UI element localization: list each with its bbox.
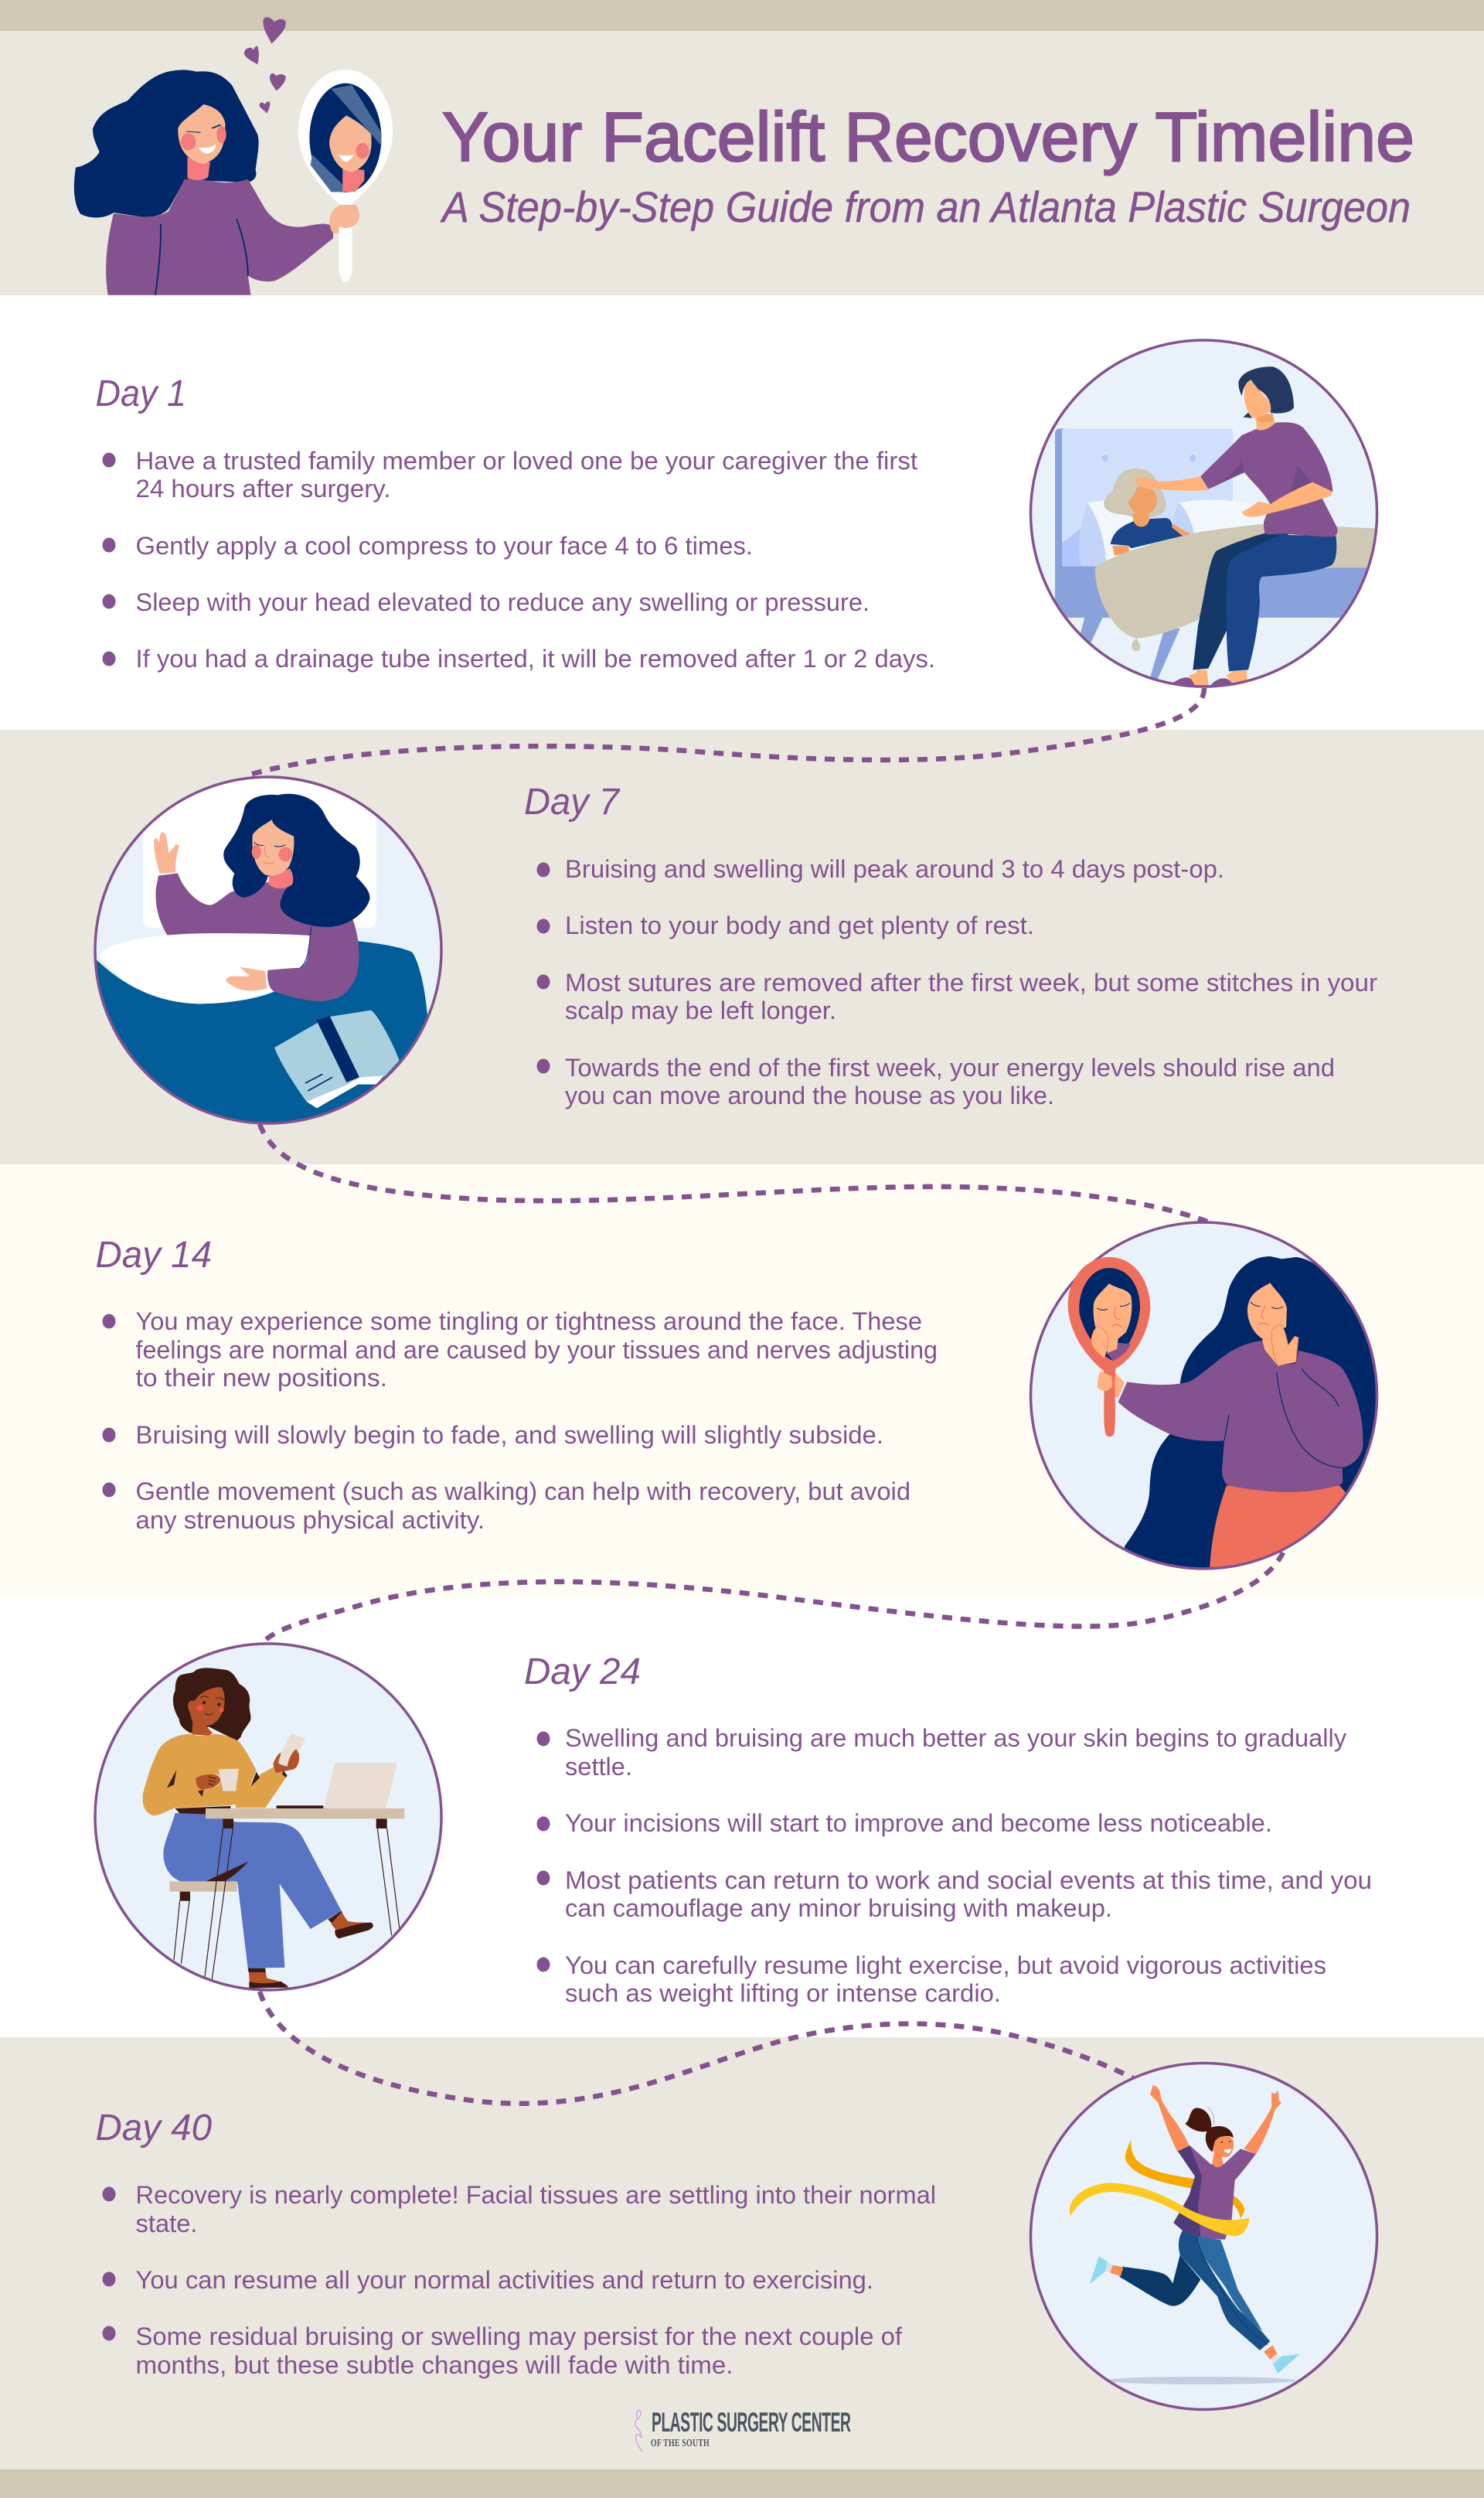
panel: header [0,17,1484,295]
text block: day 14 list: to their new positions. [136,1364,387,1392]
icon: logo figure [635,2410,642,2452]
text block: day 24 list: You can carefully resume light exercise, but avoid vigorous activities [565,1951,1326,1979]
heading: day 40: Day 40 [96,2108,212,2149]
text block: day 24 list: Swelling and bruising are much better as your skin begins to gradually [565,1724,1346,1752]
icon: woman checking face in mirror [1031,1222,1391,1593]
top band [0,0,1484,31]
heading: day 7: Day 7 [524,782,621,823]
panel: day 1 text [96,373,935,673]
text block: day 1 list: Sleep with your head elevated to reduce any swelling or pressure. [136,588,870,616]
text block: day 24 list: Most patients can return to work and social events at this time, and you [565,1866,1372,1894]
icon: woman crossing finish line [1031,2063,1377,2409]
heading: day 14: Day 14 [96,1235,212,1276]
text block: day 7 list: scalp may be left longer. [565,997,836,1024]
bullets: day 40 [102,2186,116,2341]
text block: day 7 list: Most sutures are removed after the first week, but some stitches in your [565,969,1377,997]
text block: day 7 list: Bruising and swelling will peak around 3 to 4 days post-op. [565,855,1224,883]
text block: day 14 list: feelings are normal and are caused by your tissues and nerves adjusting [136,1336,938,1364]
bottom band [0,2469,1484,2498]
text block: day 1 list: If you had a drainage tube inserted, it will be removed after 1 or 2 days. [136,645,935,673]
bullets: day 7 [536,863,550,1073]
heading: day 1: Day 1 [96,373,186,414]
text block: day 24 list: settle. [565,1753,632,1781]
icon: hand mirror [1068,1257,1150,1436]
text block: day 40 list [136,2181,936,2379]
panel: day 40 text [96,2108,936,2379]
heading: day 24: Day 24 [524,1651,641,1692]
logo: Plastic Surgery Center of the South [635,2407,851,2452]
icon: caregiver at bedside [1031,340,1377,687]
logo tagline: OF THE SOUTH [651,2436,710,2449]
panel: day 24 background [0,1598,1484,2037]
text block: day 40 list: state. [136,2210,198,2237]
arrow: dashed connectors between days [250,688,1283,2104]
text block: day 40 list: You can resume all your normal activities and return to exercising. [136,2266,873,2294]
panel: day 40 background [0,2037,1484,2469]
icon: woman with mirror and hearts [74,17,393,295]
text block: day 40 list: months, but these subtle changes will fade with time. [136,2351,733,2379]
text block: day 7 list [565,855,1377,1109]
panel: day 7 background [0,730,1484,1164]
text block: day 7 list: Towards the end of the first week, your energy levels should rise and [565,1054,1335,1082]
text block: day 14 list: any strenuous physical activity. [136,1506,485,1534]
title: Your Facelift Recovery Timeline [442,99,1414,176]
panel: day 14 background [0,1164,1484,1598]
text block: day 14 list: You may experience some tingling or tightness around the face. These [136,1307,922,1335]
bullets: day 1 [102,453,116,666]
text block: day 1 list: Have a trusted family member or loved one be your caregiver the first [136,447,917,475]
text block: day 1 list: Gently apply a cool compress to your face 4 to 6 times. [136,532,753,560]
bullets: day 24 [536,1732,550,1971]
logo wordmark: PLASTIC SURGERY CENTER [652,2407,851,2437]
text block: day 14 list [136,1307,938,1534]
text block: day 14 list: Bruising will slowly begin to fade, and swelling will slightly subside. [136,1421,883,1449]
text block: day 24 list: such as weight lifting or intense cardio. [565,1979,1001,2007]
text block: day 7 list: you can move around the house as you like. [565,1082,1054,1109]
icon: woman resting in bed [94,775,443,1125]
text block: day 40 list: Recovery is nearly complete! Facial tissues are settling into their normal [136,2181,936,2209]
text block: day 7 list: Listen to your body and get plenty of rest. [565,912,1034,939]
text block: day 14 list: Gentle movement (such as walking) can help with recovery, but avoid [136,1477,910,1505]
subtitle: A Step-by-Step Guide from an Atlanta Plastic Surgeon [440,182,1411,231]
text block: day 1 list: 24 hours after surgery. [136,475,391,503]
text block: day 40 list: Some residual bruising or swelling may persist for the next couple of [136,2322,902,2350]
panel: day 7 text [524,782,1377,1109]
text block: day 24 list: can camouflage any minor bruising with makeup. [565,1894,1112,1922]
panel: day 14 text [96,1235,938,1534]
icon: woman working at desk [95,1644,441,1990]
bullets: day 14 [102,1314,116,1497]
panel: day 1 background [0,295,1484,730]
text block: day 1 list [136,447,935,673]
text block: day 24 list [565,1724,1372,2007]
text block: day 24 list: Your incisions will start to improve and become less noticeable. [565,1809,1272,1837]
panel: day 24 text [524,1651,1372,2007]
